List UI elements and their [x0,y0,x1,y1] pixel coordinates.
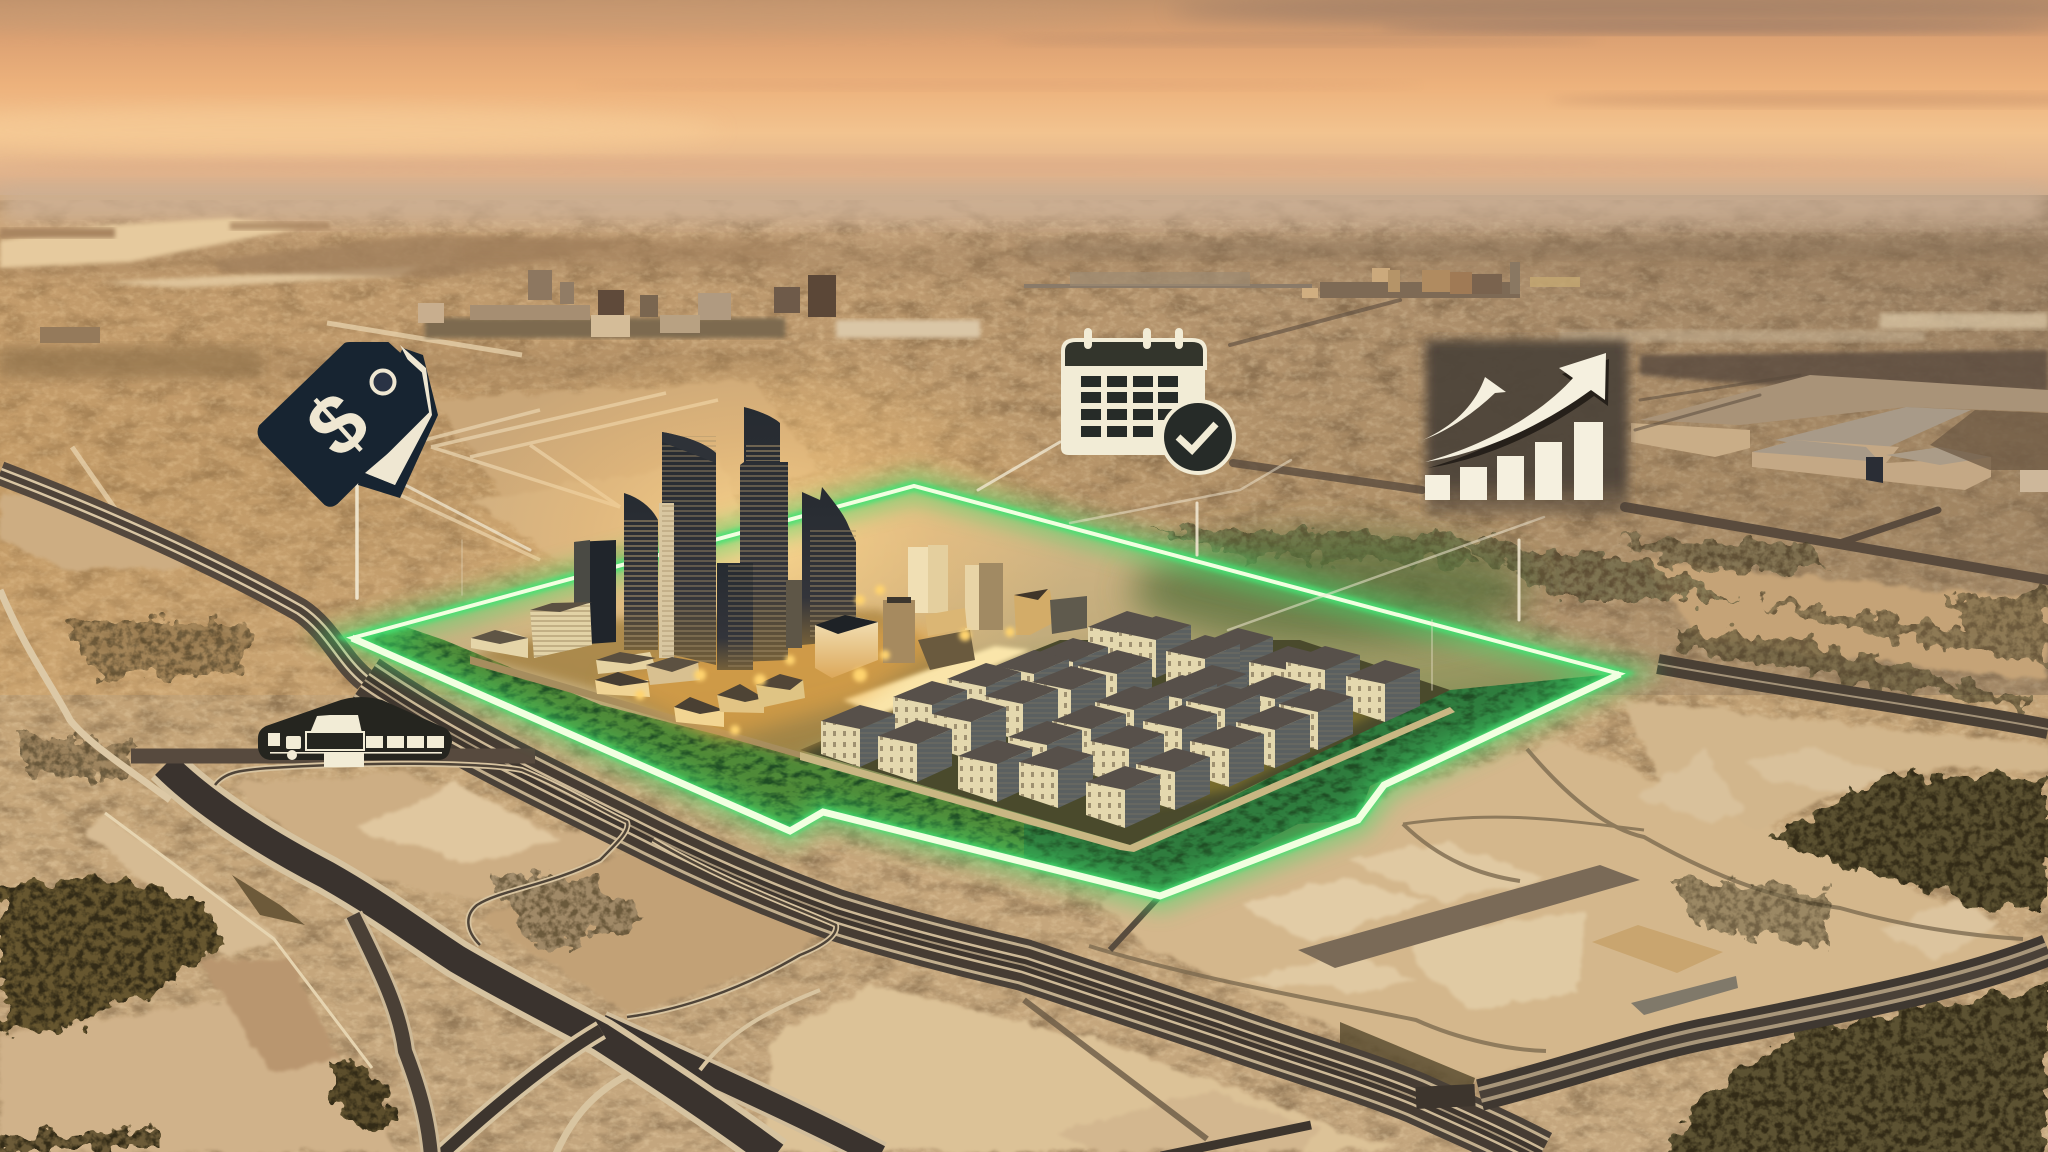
airport hangars right [1631,350,2048,492]
warm street lights [635,585,1015,735]
right road network [1230,300,2048,580]
leader lines and road lines [357,442,1544,690]
podium low rise buildings [471,589,1087,727]
icon: train [258,697,452,767]
site boundary glow [352,486,1620,896]
main highway lower [365,680,1540,1152]
forest right [1769,773,2048,908]
upper right highway [1658,664,2048,729]
icon: rising bar chart [1423,340,1628,516]
distant city right [1024,240,2048,342]
forest bottom left [0,875,398,1152]
field tracks [72,323,718,560]
low rise cream block left [530,602,592,658]
residential block grid [821,611,1420,828]
cream side tower [659,503,674,658]
vertical service road [353,915,431,1152]
sand field plots [0,380,2048,1152]
distant city left [0,240,980,377]
icon: price tag: $ [289,374,386,475]
forest bottom right [1660,986,2048,1152]
lower right highway [1480,950,2048,1095]
main highway upper [0,473,365,680]
arrows [1423,353,1609,468]
green vegetation band lower left [353,625,1024,857]
icon: price tag [259,343,438,506]
highway network [0,473,2048,1152]
lit tower cluster [883,545,1003,663]
tower left [624,493,658,650]
tallest tower [740,407,788,662]
tower right [802,487,856,645]
icon: calendar with check [1061,328,1236,475]
sky [0,0,2048,205]
lower left highway [165,765,880,1152]
tower tall left [662,432,716,665]
warm glow around towers [440,340,1080,740]
dark strips and slabs [232,865,1738,1095]
water at left horizon [0,218,640,288]
check badge [1160,399,1236,475]
skyscraper cluster [471,407,1087,735]
scrub vegetation [20,530,2048,952]
horizontal road [131,748,535,764]
calendar grid [1081,376,1178,437]
development site ground [352,340,1620,896]
tower far left [574,540,616,645]
green vegetation band lower right [1024,674,1612,894]
horizon haze [0,188,2048,222]
side roads [0,590,1475,1152]
sky clouds [0,0,2048,173]
dirt tracks right [1024,749,2023,1139]
overpass [440,1030,601,1152]
tower mid front [717,563,753,670]
bars [1425,422,1603,500]
site base plinth [470,610,1455,852]
low rise block front right [815,615,878,678]
